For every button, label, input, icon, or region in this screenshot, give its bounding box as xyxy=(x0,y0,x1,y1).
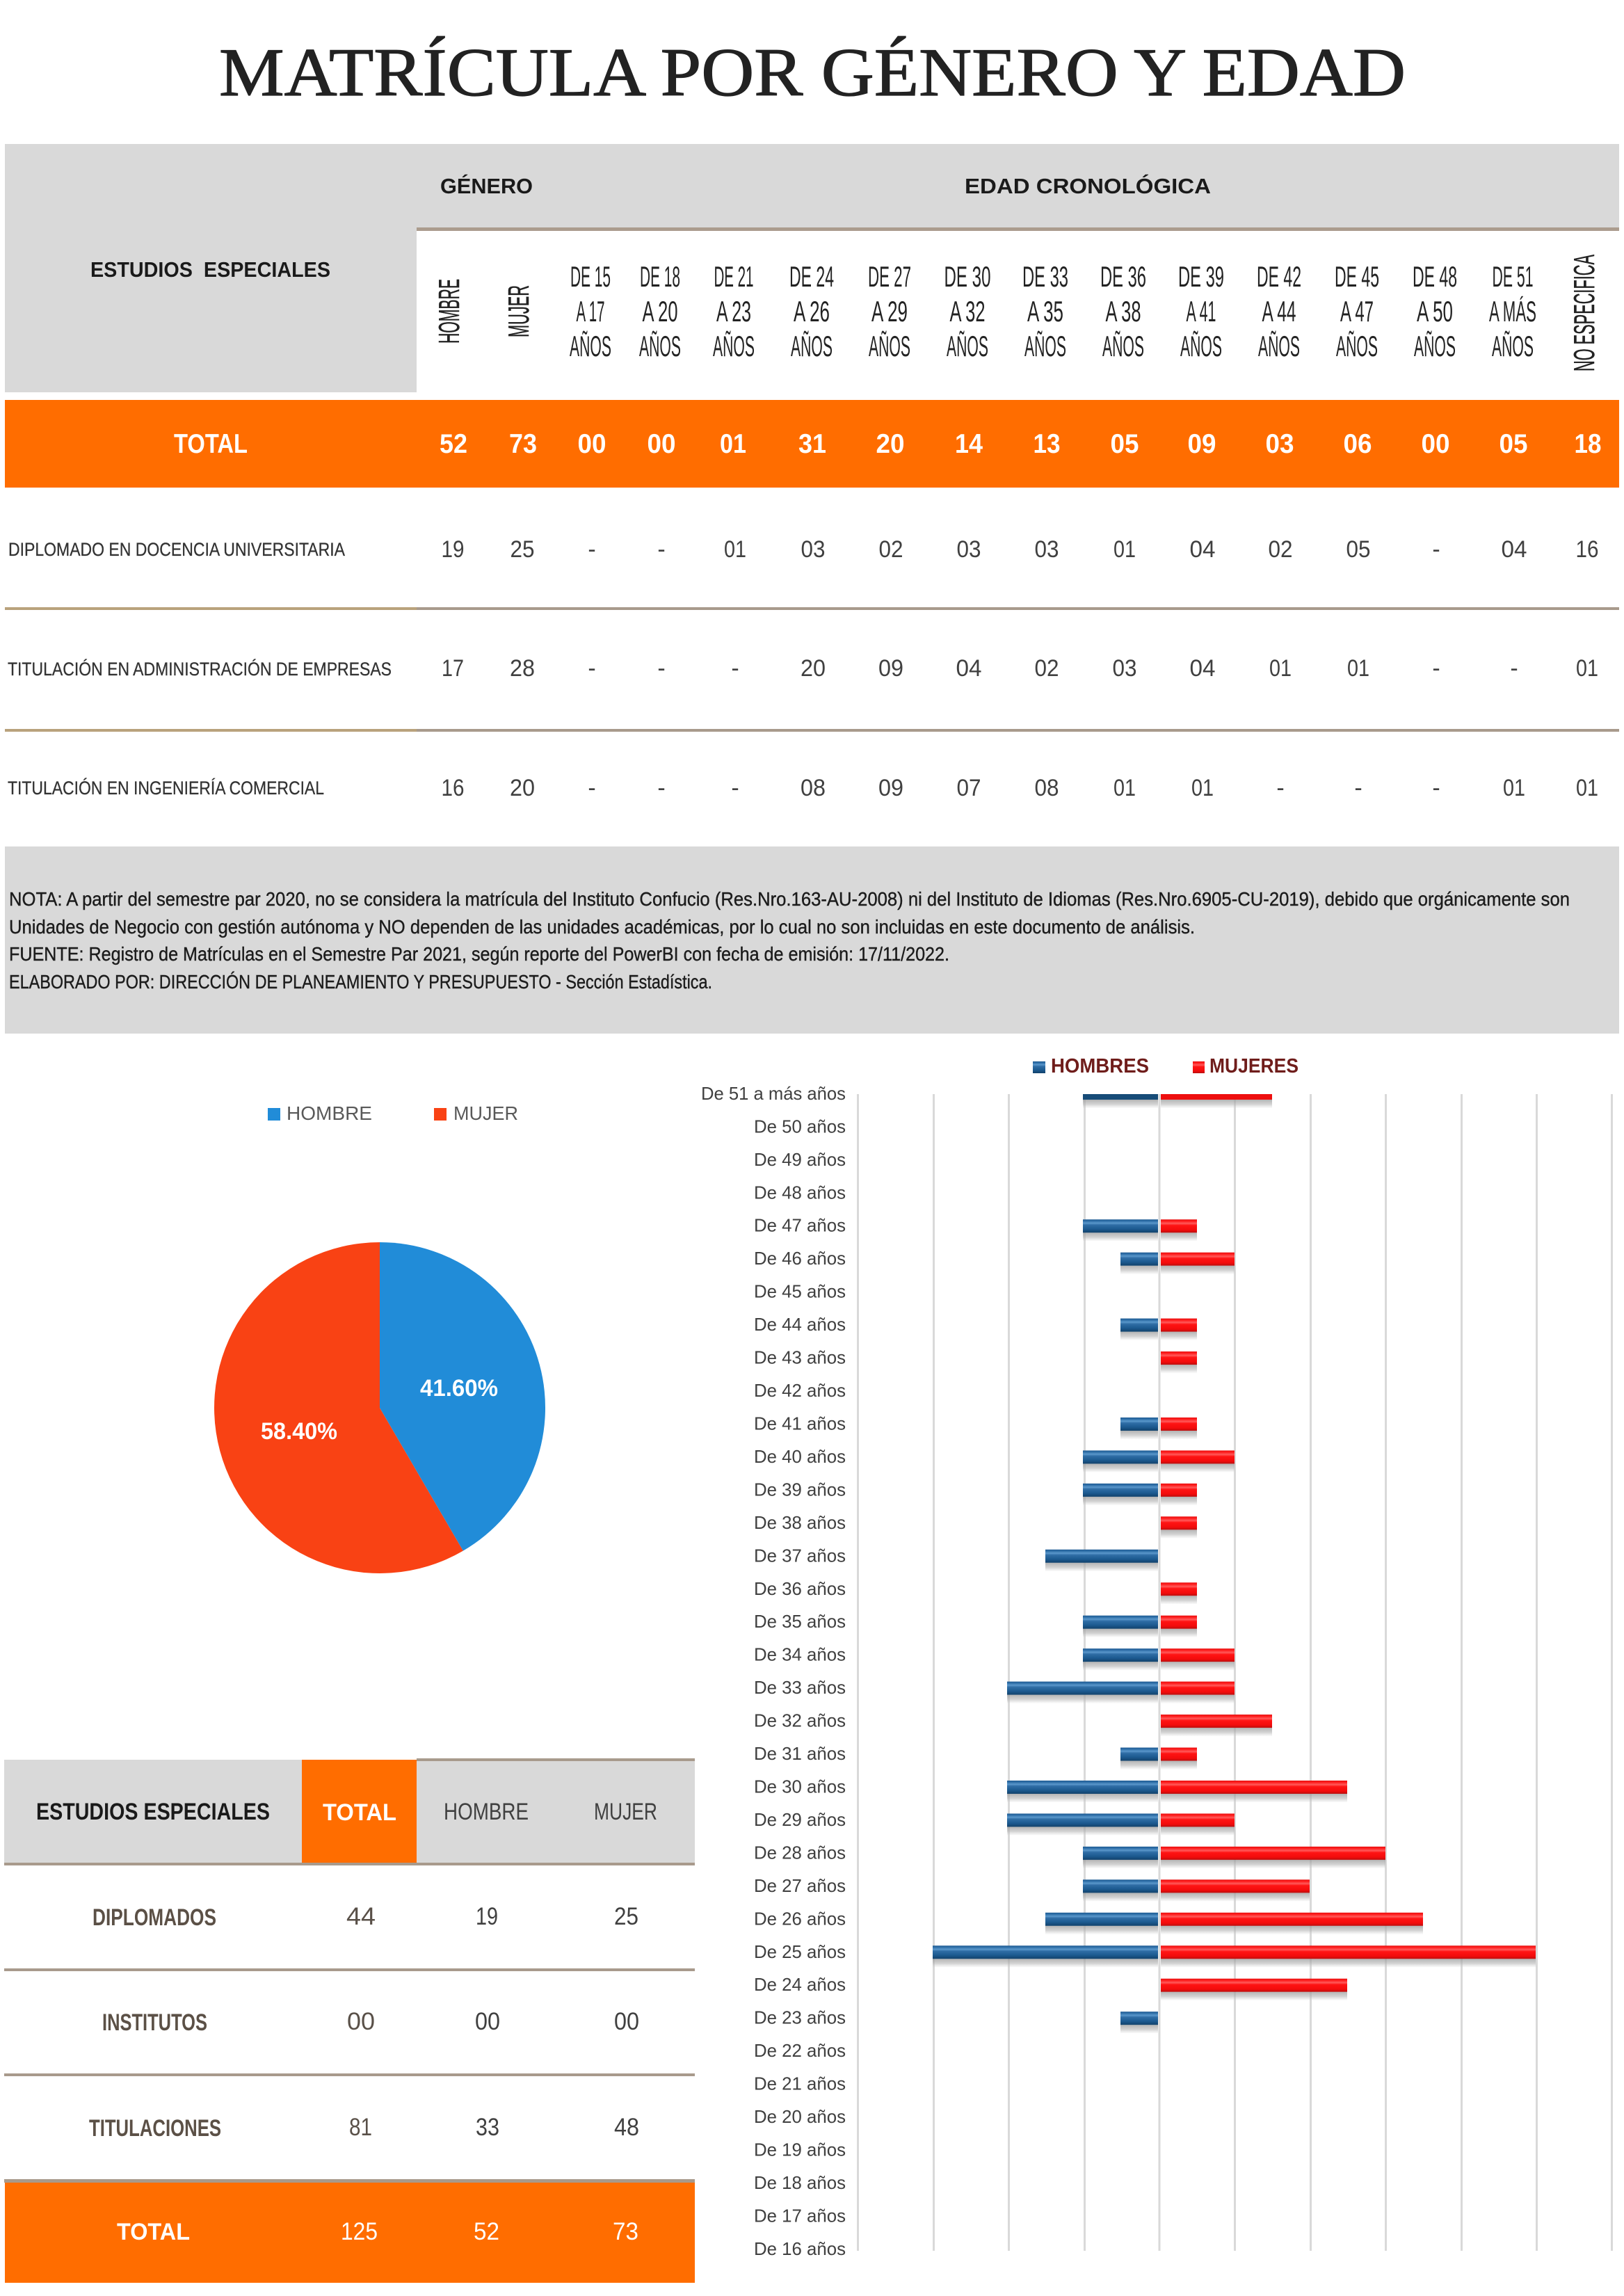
column headers: age ranges: A 38 xyxy=(1106,295,1141,328)
column headers: age ranges: AÑOS xyxy=(791,330,833,362)
y axis labels: De 28 años xyxy=(754,1842,846,1863)
column headers: age ranges: DE 18 xyxy=(640,260,680,293)
column header: no especifica: NO ESPECIFICA xyxy=(1568,255,1600,371)
column headers: age ranges xyxy=(570,260,1536,362)
summary row: total: 52 xyxy=(474,2218,499,2245)
summary row: diplomados: 44 xyxy=(346,1903,376,1930)
column headers: age ranges: DE 39 xyxy=(1178,260,1224,293)
column headers: age ranges: DE 42 xyxy=(1257,260,1301,293)
row: titulacion en administracion de empresas: - xyxy=(1510,655,1518,682)
summary row: institutos: 00 xyxy=(614,2008,639,2035)
row: diplomado en docencia universitaria: 03 xyxy=(801,536,825,563)
y axis labels: De 19 años xyxy=(754,2140,846,2160)
row: diplomado en docencia universitaria: 02 xyxy=(879,536,903,563)
note text: fuente: FUENTE: Registro de Matrículas en el Semestre Par 2021, según reporte del PowerBI con fecha de emisión: 17/11/2022. xyxy=(9,943,949,965)
total row: 01 xyxy=(720,429,746,459)
bars: 40 xyxy=(1083,1450,1235,1472)
row: titulacion en administracion de empresas: 09 xyxy=(878,655,903,682)
column headers: age ranges: AÑOS xyxy=(1102,330,1144,362)
row: titulacion en ingenieria comercial xyxy=(8,775,1598,801)
column headers: age ranges: DE 15 xyxy=(570,260,611,293)
row: titulacion en administracion de empresas: - xyxy=(1432,655,1440,682)
row: titulacion en ingenieria comercial: 20 xyxy=(510,775,535,801)
bars: 25 xyxy=(933,1945,1536,1967)
row: diplomado en docencia universitaria: 04 xyxy=(1501,536,1527,563)
column headers: age ranges: A 32 xyxy=(950,295,985,328)
y axis labels: De 34 años xyxy=(754,1644,846,1665)
pie legend xyxy=(268,1102,518,1124)
total row: 20 xyxy=(876,429,904,459)
column headers: age ranges: A 17 xyxy=(576,295,605,328)
column headers: age ranges: DE 21 xyxy=(714,260,754,293)
row: titulacion en administracion de empresas: 01 xyxy=(1576,655,1598,682)
total row: TOTAL xyxy=(174,429,248,459)
row: titulacion en administracion de empresas: 20 xyxy=(801,655,826,682)
column headers: age ranges: AÑOS xyxy=(1024,330,1066,362)
total row: 18 xyxy=(1575,429,1601,459)
y axis labels: De 24 años xyxy=(754,1974,846,1995)
y axis labels: De 49 años xyxy=(754,1149,846,1170)
bars: 30 xyxy=(1007,1781,1347,1802)
y axis labels xyxy=(701,1083,846,2259)
column headers: age ranges: AÑOS xyxy=(639,330,681,362)
row: titulacion en administracion de empresas: - xyxy=(731,655,739,682)
summary header: total cell xyxy=(302,1760,417,1864)
summary row: total: TOTAL xyxy=(117,2219,190,2245)
column headers: age ranges: AÑOS xyxy=(1414,330,1456,362)
column headers: age ranges: A 20 xyxy=(643,295,677,328)
row: diplomado en docencia universitaria: - xyxy=(1432,536,1440,563)
row: titulacion en ingenieria comercial: 01 xyxy=(1503,775,1525,801)
y axis labels: De 40 años xyxy=(754,1446,846,1467)
row: diplomado en docencia universitaria: - xyxy=(588,536,596,563)
total row: 52 xyxy=(440,429,467,459)
heading: genero: GÉNERO xyxy=(440,174,533,198)
pie slice: hombre xyxy=(380,1242,545,1551)
y axis labels: De 45 años xyxy=(754,1281,846,1302)
row: diplomado en docencia universitaria: 01 xyxy=(1114,536,1136,563)
y axis labels: De 42 años xyxy=(754,1380,846,1401)
y axis labels: De 33 años xyxy=(754,1677,846,1698)
column headers: age ranges: DE 33 xyxy=(1022,260,1068,293)
row: titulacion en ingenieria comercial: - xyxy=(1276,775,1285,801)
column headers: age ranges: AÑOS xyxy=(1258,330,1300,362)
header rule xyxy=(417,227,1619,231)
row: titulacion en administracion de empresas: 01 xyxy=(1269,655,1292,682)
summary row: diplomados: 25 xyxy=(614,1903,638,1930)
row: diplomado en docencia universitaria: 01 xyxy=(724,536,746,563)
bars: 23 xyxy=(1120,2012,1158,2033)
bars: 35 xyxy=(1083,1616,1197,1637)
column headers: age ranges: AÑOS xyxy=(1180,330,1222,362)
row: titulacion en administracion de empresas: 01 xyxy=(1347,655,1369,682)
summary row: total: 125 xyxy=(341,2218,378,2245)
bars: 24 xyxy=(1161,1979,1347,2000)
row: titulacion en ingenieria comercial: - xyxy=(657,775,666,801)
y axis labels: De 36 años xyxy=(754,1578,846,1599)
row: titulacion en administracion de empresas: 17 xyxy=(442,655,464,682)
bars: 47 xyxy=(1083,1219,1197,1241)
column headers: age ranges: AÑOS xyxy=(1336,330,1378,362)
summary header labels xyxy=(36,1799,657,1826)
bars: 31 xyxy=(1120,1748,1197,1769)
row: diplomado en docencia universitaria: 04 xyxy=(1189,536,1216,563)
column headers: age ranges: A 41 xyxy=(1187,295,1216,328)
column headers: age ranges: A 50 xyxy=(1417,295,1453,328)
column headers: age ranges: A 26 xyxy=(794,295,830,328)
column headers: age ranges: A 29 xyxy=(871,295,908,328)
chart legend xyxy=(1033,1055,1299,1077)
heading: edad cronologica: EDAD CRONOLÓGICA xyxy=(965,173,1211,198)
row: diplomado en docencia universitaria: 16 xyxy=(1576,536,1598,563)
total row: 00 xyxy=(647,429,676,459)
summary header labels: ESTUDIOS ESPECIALES xyxy=(36,1799,270,1825)
pie legend: MUJER xyxy=(453,1102,518,1124)
y axis labels: De 20 años xyxy=(754,2106,846,2127)
column headers: age ranges: DE 27 xyxy=(868,260,911,293)
row: diplomado en docencia universitaria: - xyxy=(657,536,666,563)
panel: pie chart xyxy=(214,1102,545,1573)
summary header labels: MUJER xyxy=(594,1799,657,1825)
y axis labels: De 46 años xyxy=(754,1248,846,1269)
bars: 32 xyxy=(1161,1715,1272,1736)
row: titulacion en ingenieria comercial: TITULACIÓN EN INGENIERÍA COMERCIAL xyxy=(8,777,324,798)
y axis labels: De 21 años xyxy=(754,2073,846,2094)
total row: 13 xyxy=(1034,429,1060,459)
total row: 31 xyxy=(798,429,826,459)
y axis labels: De 37 años xyxy=(754,1545,846,1566)
row: titulacion en administracion de empresas: 03 xyxy=(1113,655,1136,682)
total row: 09 xyxy=(1188,429,1216,459)
total row xyxy=(5,400,1619,488)
chart legend: HOMBRES xyxy=(1051,1055,1149,1077)
bars: 27 xyxy=(1083,1879,1310,1901)
column headers: age ranges: DE 48 xyxy=(1413,260,1457,293)
heading: estudios especiales: ESTUDIOS ESPECIALES xyxy=(90,257,330,282)
y axis labels: De 26 años xyxy=(754,1908,846,1929)
y axis labels: De 18 años xyxy=(754,2172,846,2193)
row: diplomado en docencia universitaria: DIPLOMADO EN DOCENCIA UNIVERSITARIA xyxy=(8,539,345,560)
column headers: age ranges: A 23 xyxy=(716,295,751,328)
y axis labels: De 50 años xyxy=(754,1116,846,1137)
row: titulacion en ingenieria comercial: 07 xyxy=(957,775,981,801)
column headers: age ranges: A MÁS xyxy=(1489,295,1536,328)
row: titulacion en administracion de empresas: 28 xyxy=(510,655,535,682)
total row: 05 xyxy=(1110,429,1139,459)
summary row: institutos: 00 xyxy=(347,2008,375,2035)
row: titulacion en ingenieria comercial: 01 xyxy=(1114,775,1136,801)
summary row: titulaciones xyxy=(89,2114,639,2142)
row: titulacion en ingenieria comercial: - xyxy=(1432,775,1440,801)
total row: 06 xyxy=(1344,429,1372,459)
panel: age pyramid bar chart xyxy=(701,1055,1613,2259)
summary row: institutos: INSTITUTOS xyxy=(102,2009,207,2036)
bars: 51 a mas xyxy=(1083,1094,1272,1108)
column headers: age ranges: A 47 xyxy=(1340,295,1374,328)
bars by age group xyxy=(933,1094,1536,2033)
y axis labels: De 17 años xyxy=(754,2205,846,2226)
summary row: diplomados xyxy=(93,1903,638,1931)
pie legend: HOMBRE xyxy=(287,1102,372,1124)
column headers: age ranges: DE 30 xyxy=(944,260,990,293)
bars: 39 xyxy=(1083,1484,1197,1505)
summary row: titulaciones: 81 xyxy=(349,2114,372,2141)
row: diplomado en docencia universitaria: 02 xyxy=(1269,536,1292,563)
panel: main enrolment table xyxy=(5,144,1619,801)
y axis labels: De 48 años xyxy=(754,1182,846,1203)
row: diplomado en docencia universitaria: 03 xyxy=(957,536,981,563)
y axis labels: De 31 años xyxy=(754,1743,846,1764)
y axis labels: De 32 años xyxy=(754,1710,846,1731)
row: titulacion en administracion de empresas: - xyxy=(588,655,596,682)
note text: elaborado por: ELABORADO POR: DIRECCIÓN DE PLANEAMIENTO Y PRESUPUESTO - Sección Estadística. xyxy=(9,971,712,993)
row: diplomado en docencia universitaria xyxy=(8,536,1598,563)
column header: mujer: MUJER xyxy=(502,285,535,337)
pie slice: mujer xyxy=(214,1242,463,1573)
bars: 44 xyxy=(1120,1319,1197,1340)
bars: 46 xyxy=(1120,1253,1235,1274)
y axis labels: De 35 años xyxy=(754,1611,846,1632)
column headers: age ranges: A 44 xyxy=(1262,295,1296,328)
y axis labels: De 39 años xyxy=(754,1479,846,1500)
column headers: age ranges: AÑOS xyxy=(869,330,910,362)
row: titulacion en ingenieria comercial: 08 xyxy=(801,775,826,801)
row: titulacion en administracion de empresas: 02 xyxy=(1035,655,1059,682)
y axis labels: De 25 años xyxy=(754,1941,846,1962)
title: MATRÍCULA POR GÉNERO Y EDAD xyxy=(219,35,1406,111)
total row: 14 xyxy=(955,429,983,459)
row: titulacion en administracion de empresas: 04 xyxy=(956,655,982,682)
total row: 00 xyxy=(577,429,606,459)
column headers: age ranges: DE 51 xyxy=(1493,260,1533,293)
row: diplomado en docencia universitaria: 19 xyxy=(441,536,465,563)
column headers: age ranges: AÑOS xyxy=(570,330,611,362)
panel: summary table xyxy=(4,1758,695,2283)
bars: 33 xyxy=(1007,1682,1235,1703)
bars: 34 xyxy=(1083,1648,1235,1670)
row: titulacion en administracion de empresas: 04 xyxy=(1189,655,1216,682)
y axis labels: De 51 a más años xyxy=(701,1083,846,1104)
row: titulacion en ingenieria comercial: 09 xyxy=(878,775,903,801)
column headers: age ranges: AÑOS xyxy=(947,330,988,362)
row: titulacion en administracion de empresas xyxy=(8,655,1598,682)
row: titulacion en administracion de empresas: TITULACIÓN EN ADMINISTRACIÓN DE EMPRESAS xyxy=(8,658,392,680)
row: titulacion en ingenieria comercial: 08 xyxy=(1035,775,1059,801)
bars: 26 xyxy=(1045,1913,1423,1934)
column headers: age ranges: DE 24 xyxy=(789,260,834,293)
summary row: institutos xyxy=(102,2008,639,2036)
column headers: age ranges: AÑOS xyxy=(713,330,755,362)
summary row: titulaciones: 33 xyxy=(476,2114,499,2141)
bars: 43 xyxy=(1161,1351,1197,1373)
y axis labels: De 16 años xyxy=(754,2238,846,2259)
column headers: age ranges: DE 45 xyxy=(1335,260,1379,293)
row: diplomado en docencia universitaria: 05 xyxy=(1346,536,1370,563)
summary header background xyxy=(4,1760,695,1864)
row: titulacion en ingenieria comercial: 01 xyxy=(1191,775,1214,801)
summary header labels: HOMBRE xyxy=(444,1799,529,1825)
chart legend: MUJERES xyxy=(1209,1055,1299,1077)
summary row: total xyxy=(4,2179,695,2283)
row: titulacion en ingenieria comercial: - xyxy=(1354,775,1362,801)
row: titulacion en ingenieria comercial: 16 xyxy=(441,775,465,801)
bars: 41 xyxy=(1120,1418,1197,1439)
panel: note xyxy=(5,846,1619,1034)
row: diplomado en docencia universitaria: 03 xyxy=(1035,536,1059,563)
y axis labels: De 43 años xyxy=(754,1347,846,1368)
bars: 37 xyxy=(1045,1550,1158,1571)
summary row: titulaciones: 48 xyxy=(614,2114,639,2141)
row: diplomado en docencia universitaria: 25 xyxy=(510,536,534,563)
y axis labels: De 38 años xyxy=(754,1512,846,1533)
pie label: mujer: 58.40% xyxy=(261,1418,337,1445)
y axis labels: De 41 años xyxy=(754,1413,846,1434)
summary row: diplomados: 19 xyxy=(476,1903,498,1930)
y axis labels: De 22 años xyxy=(754,2040,846,2061)
table header background xyxy=(5,144,1619,392)
total row: 03 xyxy=(1266,429,1294,459)
y axis labels: De 44 años xyxy=(754,1314,846,1335)
y axis labels: De 47 años xyxy=(754,1215,846,1236)
note text: nota continued: Unidades de Negocio con gestión autónoma y NO dependen de las unidades académicas, por lo cual no son incluidas en este documento de análisis. xyxy=(9,916,1195,938)
bars: 38 xyxy=(1161,1516,1197,1538)
y axis labels: De 30 años xyxy=(754,1776,846,1797)
summary row: institutos: 00 xyxy=(475,2008,500,2035)
total row: 73 xyxy=(509,429,537,459)
bars: 29 xyxy=(1007,1813,1235,1835)
column header: hombre: HOMBRE xyxy=(433,279,465,344)
total row: 00 xyxy=(1422,429,1449,459)
bars: 36 xyxy=(1161,1582,1197,1604)
row: titulacion en ingenieria comercial: - xyxy=(588,775,596,801)
summary row: total: 73 xyxy=(613,2218,638,2245)
column headers: age ranges: DE 36 xyxy=(1100,260,1146,293)
row: titulacion en administracion de empresas: - xyxy=(657,655,666,682)
column headers: age ranges: A 35 xyxy=(1027,295,1063,328)
total row: 05 xyxy=(1500,429,1527,459)
summary header labels: TOTAL xyxy=(323,1799,396,1826)
column headers: age ranges: AÑOS xyxy=(1492,330,1534,362)
summary row: diplomados: DIPLOMADOS xyxy=(93,1904,216,1931)
bars: 28 xyxy=(1083,1847,1385,1868)
summary row: titulaciones: TITULACIONES xyxy=(89,2115,221,2142)
y axis labels: De 27 años xyxy=(754,1875,846,1896)
row: titulacion en ingenieria comercial: 01 xyxy=(1576,775,1598,801)
row: titulacion en ingenieria comercial: - xyxy=(731,775,739,801)
pie label: hombre: 41.60% xyxy=(420,1375,498,1402)
y axis labels: De 29 años xyxy=(754,1809,846,1830)
y axis labels: De 23 años xyxy=(754,2007,846,2028)
